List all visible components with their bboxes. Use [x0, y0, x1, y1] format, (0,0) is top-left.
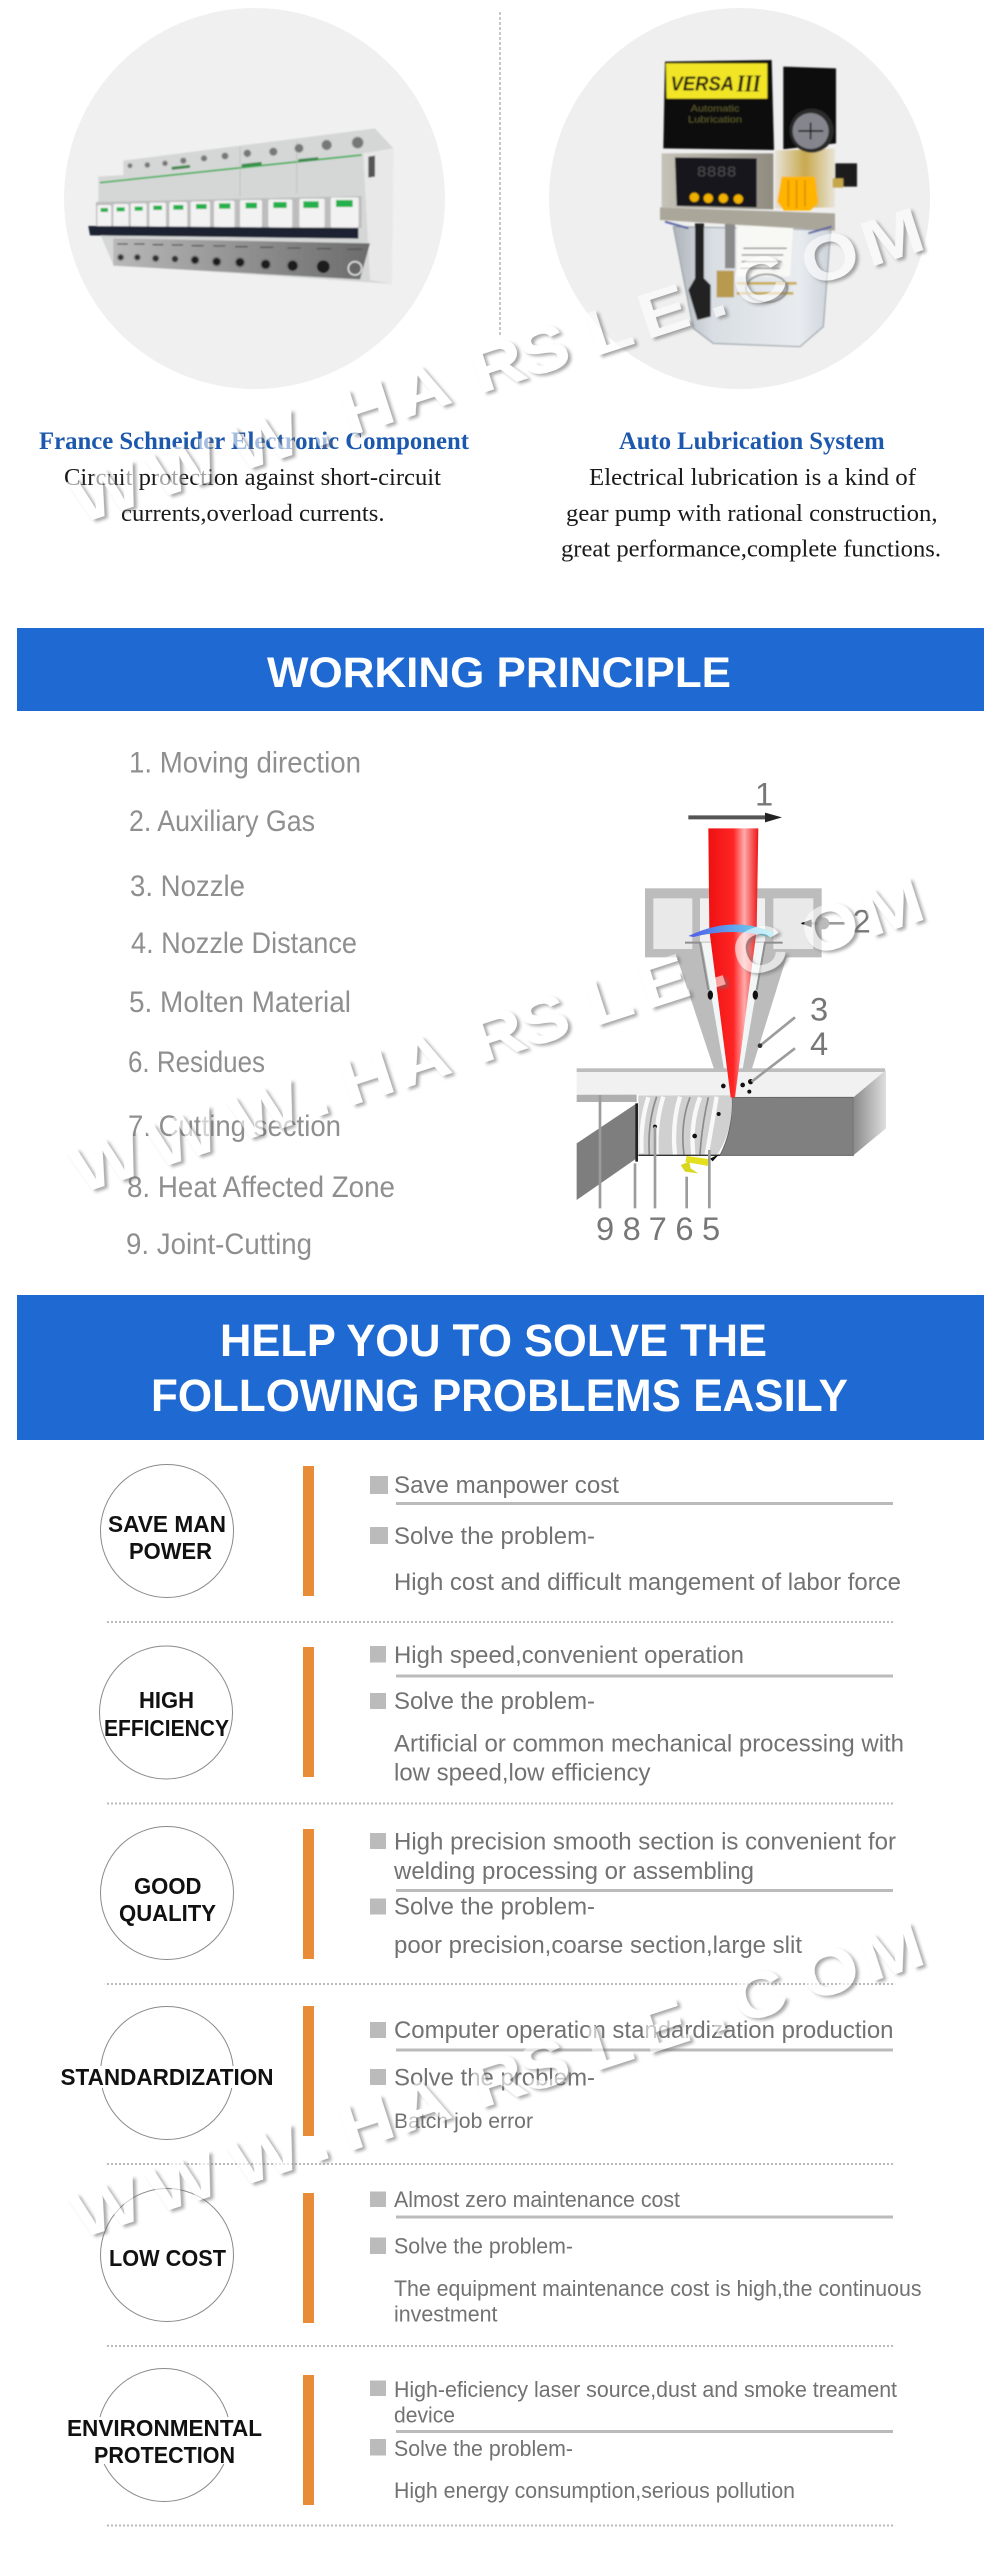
- text: benefit and problem: device: [394, 2402, 455, 2428]
- badge: environmental protection: [62, 2368, 267, 2502]
- row: high efficiency: [100, 1642, 904, 1786]
- accent bar: [303, 2193, 314, 2323]
- watermark: top: WWW.HARSLE.COM: [62, 194, 932, 537]
- row: standardization: [58, 2006, 894, 2140]
- legend: working principle list: 7. Cutting section: [128, 1110, 341, 1143]
- accent bar: [303, 2006, 314, 2136]
- watermark: bottom: WWW.HARSLE.COM: [62, 1909, 932, 2252]
- text: benefit and problem: High speed,convenient operation: [394, 1642, 744, 1669]
- badge: environmental protection: ENVIRONMENTAL: [67, 2415, 262, 2441]
- legend: working principle list: [126, 746, 395, 1261]
- badge: environmental protection: PROTECTION: [94, 2442, 235, 2468]
- text: lubrication description: great performance,complete functions.: [561, 536, 941, 562]
- accent bar: [303, 1647, 314, 1777]
- text: benefit and problem: Solve the problem-: [394, 1894, 595, 1920]
- text: benefit and problem: High cost and difficult mangement of labor force: [394, 1569, 901, 1596]
- legend: working principle list: 4. Nozzle Distance: [131, 927, 357, 960]
- text: benefit and problem: High precision smooth section is convenient for: [394, 1828, 896, 1856]
- badge: low cost: [100, 2188, 234, 2322]
- badge: high efficiency: HIGH: [139, 1687, 194, 1713]
- diagram: laser cutting head: [577, 776, 886, 1247]
- icon: circuit breaker row: [88, 128, 393, 284]
- legend: working principle list: 8. Heat Affected Zone: [127, 1171, 395, 1204]
- row: environmental protection: [62, 2368, 897, 2505]
- background circle: lubrication: [549, 8, 930, 389]
- accent bar: [303, 1466, 314, 1596]
- legend: working principle list: 2. Auxiliary Gas: [129, 805, 315, 838]
- callout lines and numbers: 8: [623, 1210, 641, 1247]
- text: benefit and problem: Solve the problem-: [394, 2234, 573, 2258]
- row: save man power: [100, 1464, 901, 1598]
- accent bar: [303, 1829, 314, 1959]
- arrow: moving direction: 1: [755, 776, 773, 813]
- icon: lubrication pump: 8888: [697, 166, 737, 182]
- heading banner: working principle: [17, 628, 984, 711]
- heading: Schneider: France Schneider Electronic Component: [39, 428, 470, 455]
- gas arrows: [653, 990, 758, 1138]
- badge: good quality: [100, 1826, 234, 1960]
- badge: high efficiency: EFFICIENCY: [104, 1715, 229, 1741]
- heading banner: solve problems: FOLLOWING PROBLEMS EASILY: [151, 1370, 848, 1421]
- heading banner: solve problems: [17, 1295, 984, 1440]
- nozzle housing: [645, 888, 822, 1075]
- icon: lubrication pump: Lubrication: [688, 115, 742, 125]
- text: benefit and problem: investment: [394, 2302, 498, 2326]
- badge: save man power: POWER: [129, 1538, 212, 1564]
- row: good quality: [100, 1826, 896, 1960]
- badge: standardization: [58, 2006, 276, 2140]
- badge: good quality: GOOD: [134, 1873, 202, 1899]
- panel: Auto lubrication: [549, 8, 941, 562]
- heading banner: solve problems: HELP YOU TO SOLVE THE: [220, 1315, 767, 1366]
- text: benefit and problem: Solve the problem-: [394, 1523, 595, 1550]
- accent bar: [303, 2375, 314, 2505]
- text: lubrication description: [561, 465, 941, 562]
- text: Schneider description: Circuit protection against short-circuit: [64, 465, 441, 491]
- laser beam: [708, 828, 758, 1097]
- legend: working principle list: 9. Joint-Cutting: [126, 1228, 312, 1261]
- text: lubrication description: gear pump with rational construction,: [566, 501, 938, 527]
- callout lines and numbers: 6: [675, 1210, 694, 1247]
- badge: high efficiency: [100, 1646, 232, 1779]
- text: benefit and problem: [370, 1642, 904, 1786]
- badge: save man power: SAVE MAN: [108, 1511, 226, 1537]
- text: benefit and problem: High-eficiency laser source,dust and smoke treament: [394, 2377, 897, 2402]
- legend: working principle list: 5. Molten Material: [129, 986, 351, 1019]
- callout lines and numbers: 2: [853, 902, 871, 939]
- callout lines and numbers: 7: [649, 1210, 667, 1247]
- icon: lubrication pump: III: [736, 71, 762, 97]
- text: benefit and problem: poor precision,coarse section,large slit: [394, 1932, 802, 1959]
- callout lines and numbers: 3: [810, 991, 828, 1028]
- text: Schneider description: currents,overload currents.: [121, 501, 384, 527]
- panel: Schneider component: [39, 8, 470, 527]
- callout lines and numbers: 5: [702, 1210, 720, 1247]
- text: benefit and problem: Save manpower cost: [394, 1472, 619, 1499]
- callout lines and numbers: [596, 902, 871, 1247]
- text: benefit and problem: Solve the problem-: [394, 2436, 573, 2461]
- text: benefit and problem: Batch job error: [394, 2110, 533, 2133]
- heading: lubrication: Auto Lubrication System: [619, 428, 885, 455]
- lens: [692, 926, 773, 936]
- text: benefit and problem: [370, 2377, 897, 2503]
- text: benefit and problem: [370, 1472, 901, 1596]
- callout lines and numbers: 9: [596, 1210, 614, 1247]
- text: benefit and problem: Almost zero maintenance cost: [394, 2187, 680, 2212]
- molten material: [681, 1154, 719, 1173]
- icon: lubrication pump: [660, 60, 857, 347]
- text: benefit and problem: The equipment maintenance cost is high,the continuous: [394, 2276, 922, 2301]
- text: benefit and problem: High energy consumption,serious pollution: [394, 2478, 795, 2503]
- text: benefit and problem: welding processing or assembling: [393, 1858, 754, 1885]
- legend: working principle list: 6. Residues: [128, 1046, 265, 1079]
- text: benefit and problem: low speed,low efficiency: [394, 1760, 650, 1786]
- divider between products: [499, 12, 501, 336]
- text: benefit and problem: Computer operation standardization production: [394, 2017, 894, 2044]
- text: lubrication description: Electrical lubrication is a kind of: [589, 465, 916, 491]
- text: benefit and problem: Solve the problem-: [394, 2064, 595, 2092]
- text: Schneider description: [64, 465, 441, 527]
- watermark: middle: WWW.HARSLE.COM: [62, 864, 932, 1207]
- text: benefit and problem: [370, 1828, 896, 1959]
- plate: workpiece: [577, 1068, 886, 1200]
- text: benefit and problem: [370, 2187, 922, 2326]
- icon: lubrication pump: Automatic: [691, 104, 740, 114]
- icon: lubrication pump: VERSA: [671, 73, 734, 96]
- text: benefit and problem: Artificial or common mechanical processing with: [394, 1730, 904, 1758]
- background circle: Schneider: [64, 8, 445, 389]
- heading banner: working principle: WORKING PRINCIPLE: [267, 649, 731, 697]
- badge: low cost: LOW COST: [109, 2245, 226, 2271]
- badge: save man power: [100, 1464, 234, 1598]
- callout lines and numbers: 4: [810, 1025, 828, 1062]
- badge: standardization: STANDARDIZATION: [60, 2064, 274, 2090]
- row: low cost: [100, 2187, 922, 2326]
- arrow: moving direction: [688, 776, 782, 822]
- legend: working principle list: 1. Moving direction: [129, 746, 361, 780]
- legend: working principle list: 3. Nozzle: [130, 870, 245, 903]
- text: benefit and problem: [370, 2017, 894, 2133]
- badge: good quality: QUALITY: [119, 1900, 216, 1926]
- text: benefit and problem: Solve the problem-: [394, 1688, 595, 1715]
